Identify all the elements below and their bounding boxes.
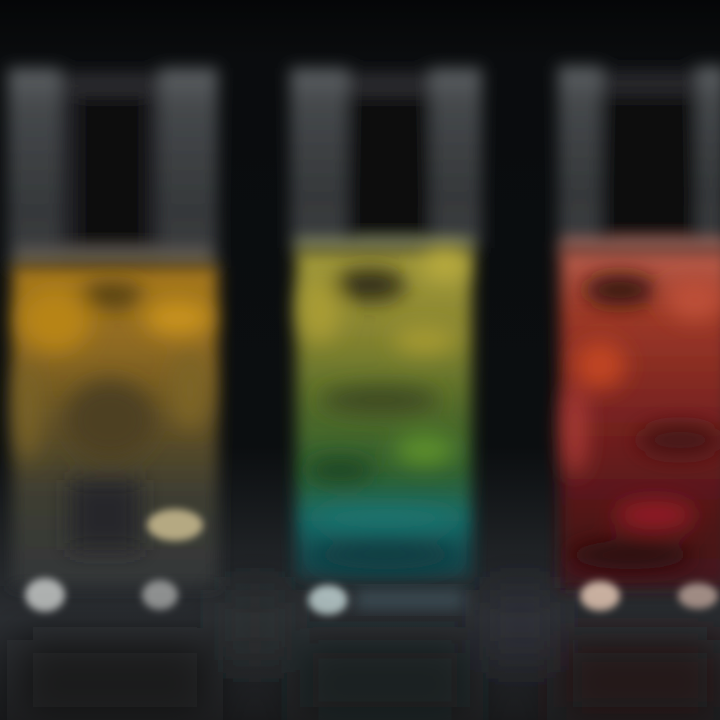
table reflections [20,590,720,720]
glass 2: yellow to green to teal liquid [290,68,482,615]
glass 1: amber liquid [8,68,218,612]
glass 3: red liquid [558,66,720,611]
